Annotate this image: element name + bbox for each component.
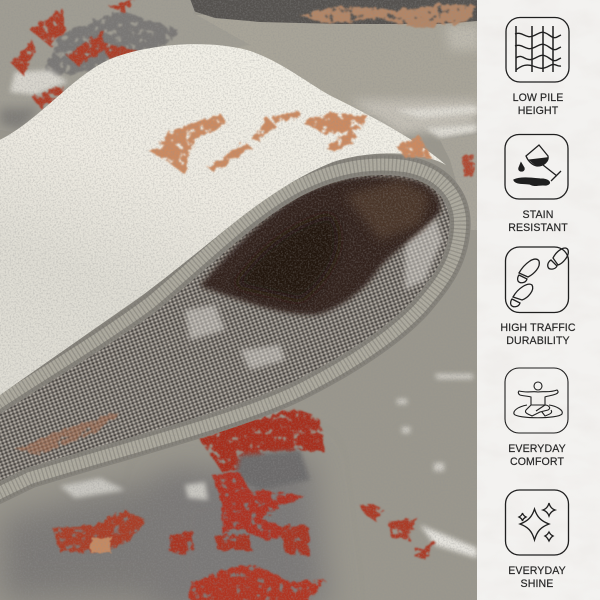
feature: high traffic durability [500,247,576,347]
panel: feature sidebar [477,0,600,600]
feature: low pile height: LOW PILE [513,92,563,104]
feature: low pile height [506,18,569,117]
feature: low pile height: HEIGHT [518,105,559,117]
icon: spilled wine glass [505,134,568,199]
icon: seated person on mat [505,368,568,433]
feature: everyday comfort: EVERYDAY [508,443,566,455]
feature: everyday comfort [505,368,568,468]
feature: stain resistant [505,134,568,234]
rolled rug binding edge [0,164,460,495]
icon: footprints [506,247,568,312]
red patches [200,408,324,472]
feature: everyday comfort: COMFORT [510,456,564,468]
feature: stain resistant: STAIN [523,209,553,221]
bottom floor area [0,374,477,600]
feature: everyday shine: SHINE [521,578,553,590]
feature: everyday shine [506,490,568,590]
feature: stain resistant: RESISTANT [508,222,568,234]
top left patterned area [0,0,180,130]
icon: woven pile [506,18,569,82]
icon: sparkles [506,490,568,555]
cream rug top surface [0,44,446,395]
feature: high traffic durability: HIGH TRAFFIC [500,322,576,334]
rug underside: weave and dark cavity [0,164,460,495]
orange accents on cream surface [150,110,432,175]
feature: high traffic durability: DURABILITY [506,335,570,347]
feature: everyday shine: EVERYDAY [508,565,566,577]
top right floor area [190,0,477,230]
carpet grain texture [0,0,477,600]
